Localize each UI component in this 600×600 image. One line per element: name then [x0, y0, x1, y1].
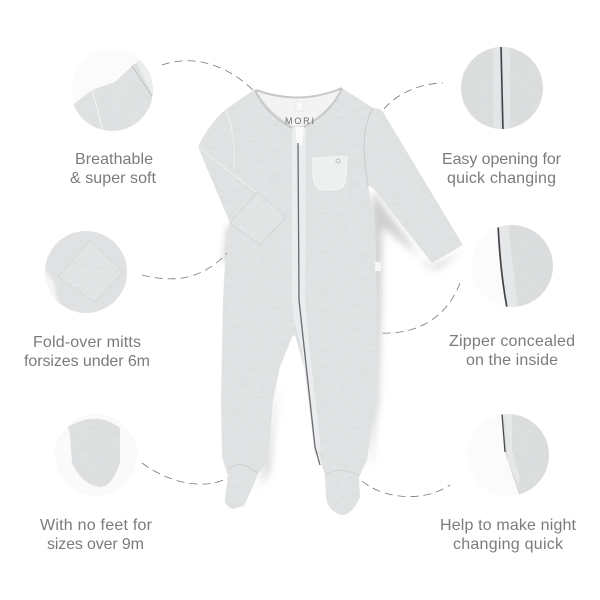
MORI logo: MORI — [285, 116, 314, 126]
caption: easy opening — [442, 151, 562, 187]
caption: breathable: & super soft — [70, 170, 157, 187]
connector: easy opening — [384, 83, 443, 109]
detail circle: zipper end — [501, 414, 549, 494]
right sleeve seam — [364, 108, 373, 186]
connector: zipper — [380, 283, 460, 333]
foot seams — [228, 465, 359, 476]
caption: breathable — [70, 151, 157, 187]
detail circle: zipper front — [460, 46, 544, 130]
pocket — [313, 156, 347, 190]
connector: night changing — [362, 481, 450, 497]
zipper placket — [292, 128, 321, 456]
detail circle: foot — [55, 414, 137, 496]
caption: no feet: sizes over 9m — [47, 536, 144, 553]
caption: easy opening: quick changing — [447, 170, 556, 187]
detail circle: breathable fabric — [74, 60, 153, 131]
caption: breathable: Breathable — [75, 151, 153, 168]
caption: no feet — [40, 517, 153, 553]
connector: no feet — [142, 463, 228, 484]
inner collar — [256, 88, 342, 126]
caption: night changing: Help to make night — [440, 517, 577, 534]
zipper top opening — [295, 127, 304, 145]
caption: night changing: changing quick — [453, 536, 564, 553]
caption: zipper concealed: Zipper concealed — [449, 333, 575, 350]
caption: zipper concealed — [449, 333, 575, 369]
connector: breathable — [162, 61, 255, 92]
caption: fold-over mitts: forsizes under 6m — [24, 353, 150, 370]
caption: zipper concealed: on the inside — [466, 352, 558, 369]
caption: easy opening: Easy opening for — [442, 151, 562, 168]
pocket snap — [336, 159, 340, 163]
caption: fold-over mitts: Fold-over mitts — [33, 334, 141, 351]
caption: fold-over mitts — [24, 334, 150, 370]
detail circle: fold-over mitt — [42, 230, 128, 316]
garment body and sleeves — [198, 88, 463, 515]
side tab — [375, 262, 381, 271]
collar trim — [255, 88, 342, 128]
caption: no feet: With no feet for — [40, 517, 153, 534]
zipper line — [298, 143, 320, 465]
garment drop shadow — [224, 190, 462, 488]
detail circle: concealed zipper — [497, 225, 553, 307]
left sleeve seam — [198, 110, 256, 192]
connector: mitts — [142, 253, 227, 279]
caption: night changing — [440, 517, 577, 553]
left fold-over mitt — [230, 192, 286, 245]
size label tag — [296, 102, 303, 111]
garment: grey zip sleepsuit — [198, 88, 463, 515]
